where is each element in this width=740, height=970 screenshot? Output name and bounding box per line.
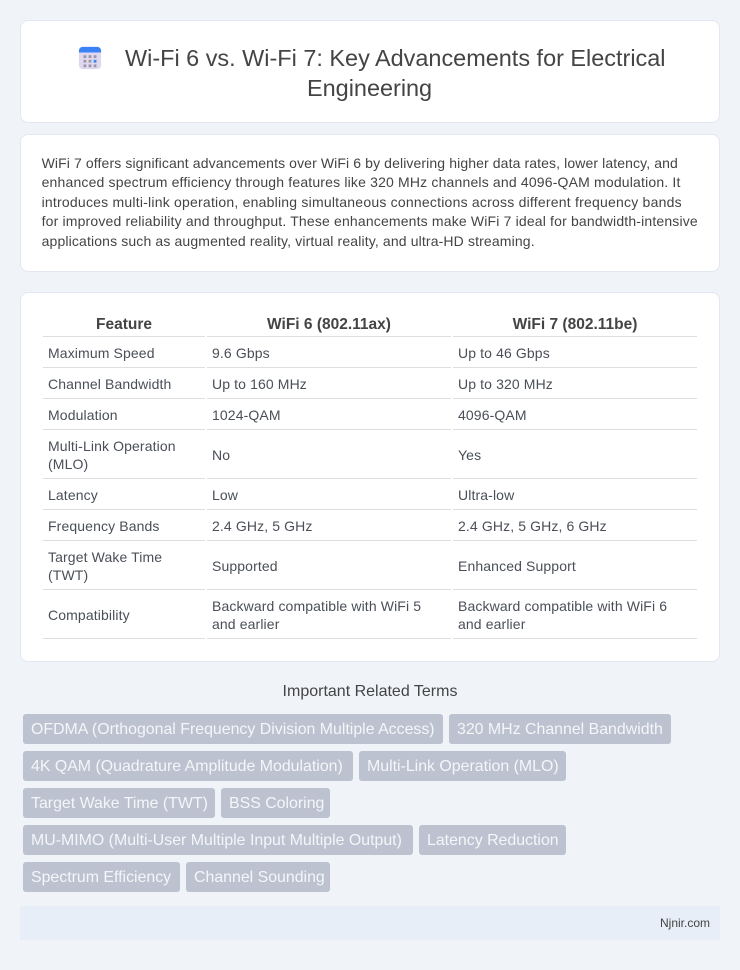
row: maximum speed: Maximum Speed bbox=[48, 345, 155, 361]
row: latency bbox=[48, 487, 514, 503]
related term tags: Spectrum Efficiency bbox=[31, 869, 171, 886]
row: modulation: Modulation bbox=[48, 407, 118, 423]
related term tags: 4K QAM (Quadrature Amplitude Modulation) bbox=[31, 758, 343, 775]
intro paragraph: enhanced spectrum efficiency through features like 320 MHz channels and 4096-QAM modulation. It bbox=[42, 174, 681, 190]
row: multi-link operation: No bbox=[212, 447, 230, 463]
heading: related terms: Important Related Terms bbox=[283, 683, 457, 700]
table header: WiFi 6 (802.11ax) bbox=[267, 316, 391, 333]
intro paragraph: WiFi 7 offers significant advancements over WiFi 6 by delivering higher data rates, lower latency, and bbox=[42, 154, 678, 170]
related term tags: 320 MHz Channel Bandwidth bbox=[457, 721, 663, 738]
title: Engineering bbox=[307, 75, 432, 101]
related term tags: Latency Reduction bbox=[427, 832, 559, 849]
related term tags bbox=[23, 714, 671, 892]
row: multi-link operation: Yes bbox=[458, 447, 481, 463]
row: multi-link operation: Multi-Link Operation bbox=[48, 438, 176, 454]
icon: calendar bbox=[78, 46, 102, 70]
row: maximum speed: Up to 46 Gbps bbox=[458, 345, 550, 361]
row: channel bandwidth bbox=[48, 376, 553, 392]
row: compatibility: and earlier bbox=[458, 616, 525, 632]
row: frequency bands: 2.4 GHz, 5 GHz, 6 GHz bbox=[458, 518, 607, 534]
row: latency: Latency bbox=[48, 487, 98, 503]
footer bbox=[20, 906, 720, 940]
row: modulation bbox=[48, 407, 527, 423]
row: compatibility: Backward compatible with WiFi 5 bbox=[212, 598, 421, 614]
related term tags: Multi-Link Operation (MLO) bbox=[367, 758, 559, 775]
row: target wake time: Enhanced Support bbox=[458, 558, 576, 574]
row: frequency bands: 2.4 GHz, 5 GHz bbox=[212, 518, 312, 534]
panel: intro text bbox=[20, 134, 720, 272]
row: modulation: 1024-QAM bbox=[212, 407, 281, 423]
row: channel bandwidth: Up to 320 MHz bbox=[458, 376, 553, 392]
row: target wake time: Supported bbox=[212, 558, 278, 574]
intro paragraph: introduces multi-link operation, enabling simultaneous connections across different frequency bands bbox=[42, 194, 682, 210]
row: compatibility: Backward compatible with WiFi 6 bbox=[458, 598, 667, 614]
intro paragraph: applications such as augmented reality, virtual reality, and ultra-HD streaming. bbox=[42, 233, 535, 249]
row: target wake time: Target Wake Time bbox=[48, 549, 162, 565]
intro paragraph bbox=[42, 154, 698, 249]
panel: comparison table bbox=[20, 292, 720, 662]
row: latency: Low bbox=[212, 487, 238, 503]
table header: WiFi 7 (802.11be) bbox=[513, 316, 637, 333]
row: compatibility: and earlier bbox=[212, 616, 279, 632]
row: frequency bands: Frequency Bands bbox=[48, 518, 160, 534]
row: compatibility bbox=[48, 598, 667, 632]
title: Wi-Fi 6 vs. Wi-Fi 7: Key Advancements for Electrical bbox=[125, 45, 666, 71]
related term tags: MU-MIMO (Multi-User Multiple Input Multiple Output) bbox=[31, 832, 402, 849]
table header bbox=[96, 316, 637, 333]
row: target wake time: (TWT) bbox=[48, 567, 88, 583]
row: target wake time bbox=[48, 549, 576, 583]
row: compatibility: Compatibility bbox=[48, 607, 130, 623]
row: multi-link operation: (MLO) bbox=[48, 456, 88, 472]
footer credit: Njnir.com bbox=[660, 916, 710, 930]
related term tags: Channel Sounding bbox=[194, 869, 325, 886]
row: maximum speed bbox=[48, 345, 550, 361]
related term tags: Target Wake Time (TWT) bbox=[31, 795, 208, 812]
related term tags: OFDMA (Orthogonal Frequency Division Multiple Access) bbox=[31, 721, 435, 738]
intro paragraph: for improved reliability and throughput. These enhancements make WiFi 7 ideal for bandwidth-intensive bbox=[42, 213, 698, 229]
row: channel bandwidth: Up to 160 MHz bbox=[212, 376, 307, 392]
related term tags: BSS Coloring bbox=[229, 795, 324, 812]
panel: header bbox=[20, 20, 720, 123]
row: latency: Ultra-low bbox=[458, 487, 514, 503]
row: maximum speed: 9.6 Gbps bbox=[212, 345, 270, 361]
row: frequency bands bbox=[48, 518, 607, 534]
title bbox=[125, 45, 666, 101]
row: channel bandwidth: Channel Bandwidth bbox=[48, 376, 171, 392]
table header: Feature bbox=[96, 316, 152, 333]
row: modulation: 4096-QAM bbox=[458, 407, 527, 423]
row: multi-link operation bbox=[48, 438, 481, 472]
